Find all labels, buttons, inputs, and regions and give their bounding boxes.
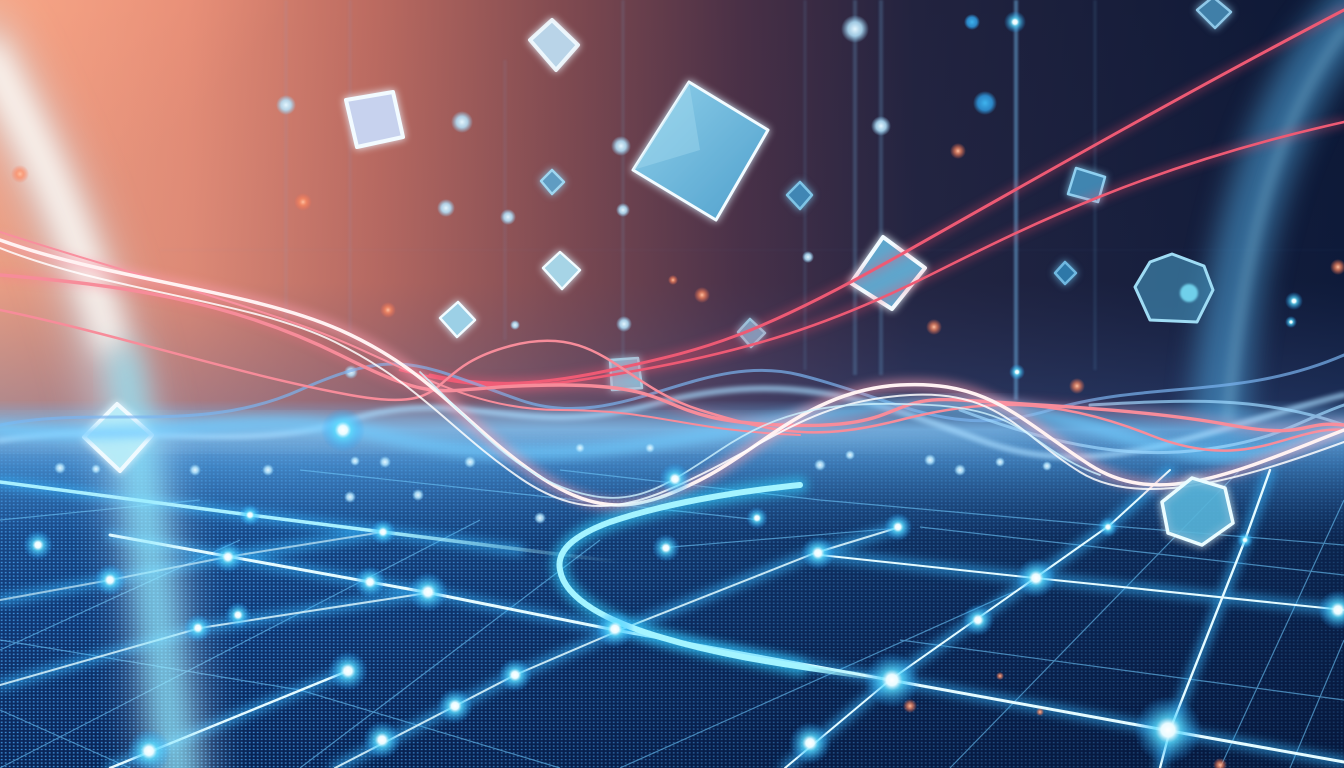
white main wave bundle xyxy=(0,240,1344,506)
small square cluster xyxy=(440,0,1231,390)
square: top centre xyxy=(530,20,578,70)
floating particles xyxy=(11,11,1344,394)
translucent floating squares xyxy=(84,0,1231,471)
grid line glow xyxy=(0,470,1344,768)
cyan swoosh curve xyxy=(559,485,880,678)
panel: warm to navy sky background xyxy=(0,0,1344,470)
vertical light columns in the sky xyxy=(160,0,1344,400)
square: on red lines xyxy=(851,237,925,309)
right blue light beam xyxy=(1218,10,1344,430)
blue horizon waves xyxy=(0,355,1344,457)
faint floor grid lines xyxy=(0,470,1344,768)
square: upper left xyxy=(346,92,403,147)
grid line core xyxy=(0,470,1344,768)
hexagon: upper right xyxy=(1135,254,1213,322)
glowing grid nodes xyxy=(23,408,1344,768)
large square xyxy=(633,82,768,220)
square: left on horizon xyxy=(84,404,152,471)
panel: dotted floor xyxy=(0,400,1344,768)
red rising curves xyxy=(400,10,1344,386)
pink wave lines xyxy=(0,232,1344,451)
bright floor grid lines xyxy=(0,470,1344,768)
hexagon: lower right xyxy=(1162,478,1233,545)
left white light beam xyxy=(0,40,180,768)
